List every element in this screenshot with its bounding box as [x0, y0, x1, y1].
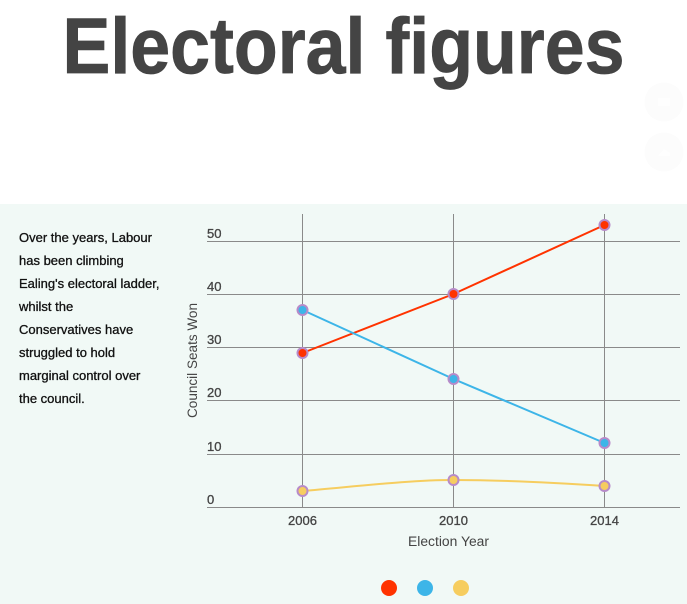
y axis labels: 0 [207, 492, 214, 507]
text block: description: Over the years, Labour [19, 230, 153, 245]
y axis labels [207, 226, 221, 507]
y axis labels: 20 [207, 385, 221, 400]
y axis labels: 10 [207, 439, 221, 454]
x axis title: Election Year [408, 534, 490, 549]
x axis labels: 2014 [590, 513, 619, 528]
panel: chart background [0, 204, 687, 604]
y axis labels: 40 [207, 279, 221, 294]
text block: description: marginal control over [19, 368, 141, 383]
line chart [185, 214, 680, 549]
chart grid [207, 214, 680, 508]
y axis labels: 30 [207, 332, 221, 347]
y axis title: Council Seats Won [185, 303, 200, 418]
text block: description: struggled to hold [19, 345, 115, 360]
text block: description: has been climbing [19, 253, 124, 268]
x axis labels [288, 513, 619, 528]
text block: description: the council. [19, 391, 85, 406]
series: third party line [298, 475, 610, 496]
text block: description: Conservatives have [19, 322, 133, 337]
x axis labels: 2006 [288, 513, 317, 528]
title: Electoral figures [62, 1, 624, 90]
x axis labels: 2010 [439, 513, 468, 528]
legend [381, 580, 469, 596]
text block: description: Ealing's electoral ladder, [19, 276, 160, 291]
icon: faint share button bottom [644, 132, 684, 172]
series: Conservative line [298, 305, 610, 448]
text block: description: whilst the [18, 299, 73, 314]
series: Labour line [298, 220, 610, 358]
icon: faint share button top [644, 82, 684, 122]
y axis labels: 50 [207, 226, 221, 241]
